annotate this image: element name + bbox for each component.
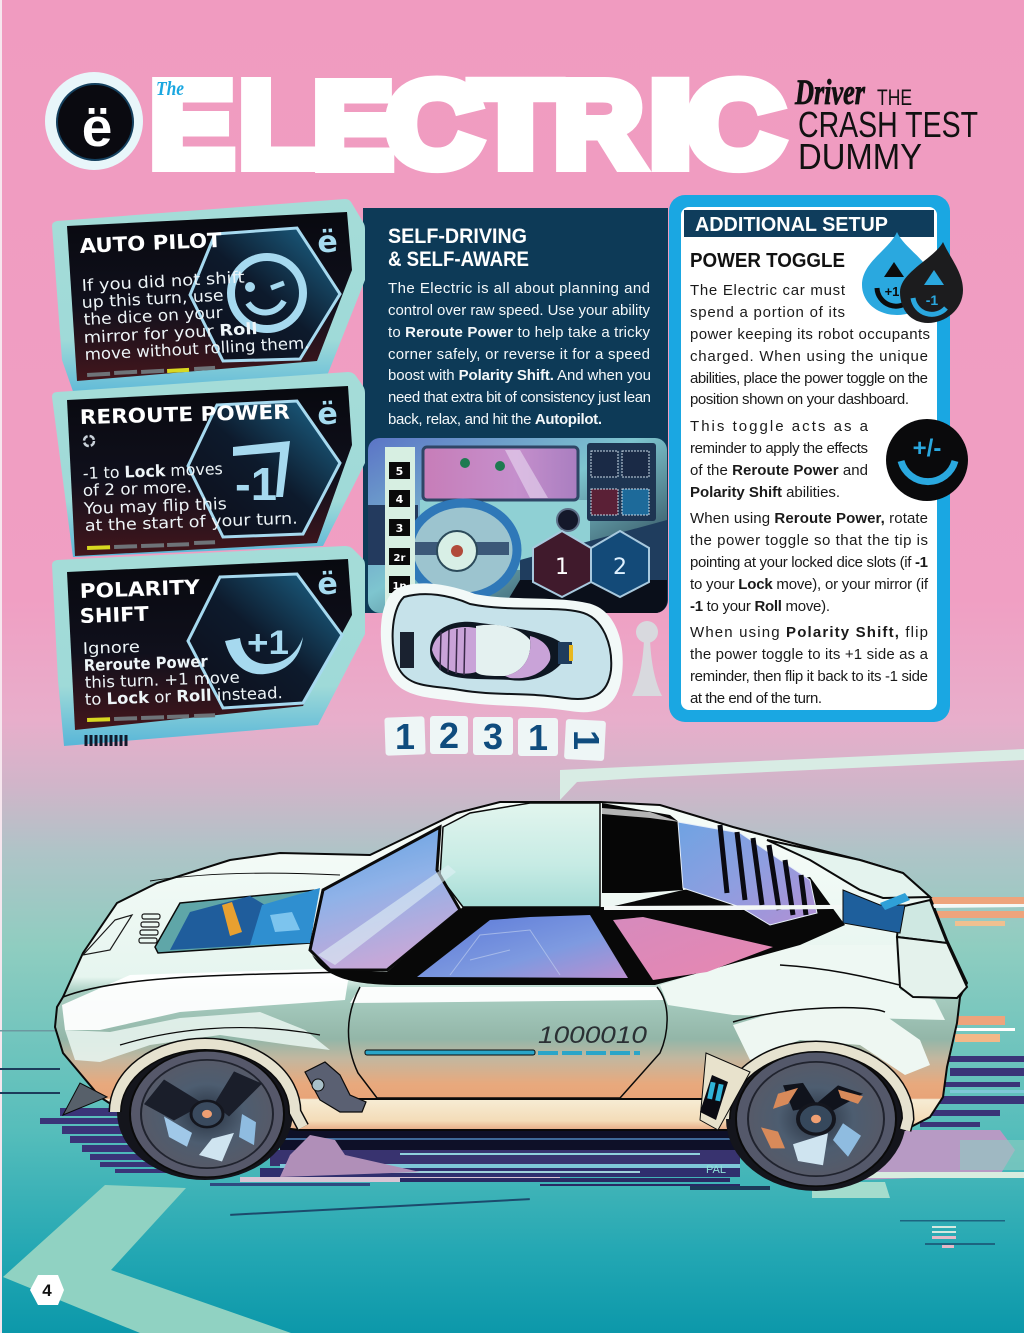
dashboard illustration — [368, 438, 667, 613]
body text: using reroute power: -1 to your Roll move). — [690, 598, 830, 615]
card: auto pilot: up this turn, use — [81, 286, 224, 312]
body text: self-driving description: to Reroute Power to help take a tricky — [388, 324, 650, 341]
title: The Electric: C — [687, 56, 784, 192]
body text: self-driving description: control over raw speed. Use your ability — [388, 302, 650, 319]
hexagon slots 1 and 2: 1 — [555, 555, 569, 580]
body text: power toggle intro: position shown on your dashboard. — [690, 391, 909, 408]
dice tiles: 1 2 3 1 1: 3 — [483, 716, 503, 757]
icon: wink smiley — [231, 257, 303, 329]
title: The Electric: E — [150, 56, 234, 192]
body text: using polarity shift: the power toggle to its +1 side as a — [690, 646, 929, 663]
dice tiles: 1 2 3 1 1: 1 — [528, 717, 548, 758]
title: The Electric: L — [239, 56, 314, 192]
logo badge — [45, 72, 143, 170]
page number badge — [30, 1275, 64, 1305]
card: auto pilot: AUTO PILOT — [79, 228, 222, 258]
orange streaks — [925, 897, 1024, 1042]
title: The Electric: R — [554, 56, 643, 192]
card: polarity shift: Ignore — [82, 637, 140, 658]
sill line — [340, 1098, 710, 1100]
card: polarity shift: to Lock or Roll instead. — [84, 683, 283, 709]
card: polarity shift: SHIFT — [79, 602, 150, 628]
body text: using polarity shift: reminder, then flip it back to its -1 side — [690, 668, 928, 685]
rear-view mirror — [423, 447, 578, 500]
hood vents — [83, 914, 160, 955]
spoiler — [767, 840, 967, 998]
power gauge — [557, 509, 579, 531]
icon: power toggle black drop: -1 — [926, 292, 938, 308]
dice tiles: 1 2 3 1 1: 2 — [439, 715, 459, 756]
title: The Electric — [150, 56, 784, 193]
logo mark: ë — [316, 567, 339, 603]
icon: reroute bracket — [233, 441, 290, 497]
dice tiles: 1 2 3 1 1 — [384, 715, 607, 761]
front wheel — [130, 1051, 284, 1177]
icon: flip arrows — [84, 436, 94, 446]
logo badge: ë — [82, 96, 112, 158]
body text: using reroute power: pointing at your locked dice slots (if -1 — [690, 554, 928, 571]
gear track — [385, 447, 415, 613]
front fin — [63, 1083, 107, 1115]
icon: plus one smile: +1 — [247, 624, 289, 662]
additional setup header — [684, 210, 934, 237]
windshield — [310, 827, 460, 970]
subtitle: driver the crash test dummy: CRASH TEST — [798, 104, 978, 145]
dice tiles: 1 2 3 1 1: 1 — [395, 716, 415, 757]
icon: plus minus toggle — [886, 419, 968, 501]
body text: self-driving description: The Electric is all about planning and — [388, 280, 650, 297]
robot arm behind spoiler — [843, 890, 905, 933]
body text: using polarity shift: When using Polarity Shift, flip — [690, 624, 928, 641]
heading: self-driving — [388, 225, 529, 271]
status dashes — [87, 540, 215, 550]
body text: toggle reminder: Polarity Shift abilities. — [690, 484, 840, 501]
front side window — [417, 915, 628, 978]
title: The Electric: E — [313, 57, 393, 193]
artist signature: PAL — [706, 1164, 726, 1176]
icon: plus one smile — [225, 624, 303, 674]
gear track: 3 — [396, 522, 403, 535]
door outline — [348, 987, 667, 1098]
rear black pillar — [602, 803, 683, 893]
pawn token — [632, 621, 662, 696]
rear wheel — [736, 1052, 896, 1186]
subtitle: driver the crash test dummy: DUMMY — [798, 136, 922, 177]
body text: power toggle intro: charged. When using the unique — [690, 348, 928, 365]
page number badge: 4 — [42, 1281, 52, 1300]
body text: using reroute power — [690, 510, 929, 615]
body text: self-driving description: need that extra bit of consistency just lean — [388, 389, 651, 406]
body text: toggle reminder: This toggle acts as a — [690, 418, 869, 435]
card: auto pilot: If you did not shift — [81, 267, 245, 295]
body text: using reroute power: the power toggle so that the tip is — [690, 532, 928, 549]
card: auto pilot: mirror for your Roll — [83, 319, 258, 347]
barcode — [86, 735, 126, 746]
rear side window — [613, 917, 773, 980]
right streaks — [860, 1130, 1015, 1180]
car illustration — [55, 802, 1024, 1191]
blue door stripe — [365, 1050, 640, 1055]
icon: power toggle blue drop — [862, 232, 933, 315]
body text: power toggle intro: The Electric car must — [690, 282, 846, 299]
card: reroute power: REROUTE POWER — [80, 400, 290, 429]
subtitle: driver the crash test dummy — [794, 72, 978, 177]
icon: power toggle black drop — [900, 242, 963, 323]
panel: additional setup — [669, 195, 950, 722]
body text: self-driving description: corner safely, or reverse it for a speed — [388, 346, 650, 363]
card: auto pilot: the dice on your — [83, 303, 223, 329]
body text: self-driving description: boost with Polarity Shift. And when you — [388, 367, 651, 384]
rear vent — [700, 1053, 750, 1130]
card: reroute power — [52, 372, 365, 557]
dice tiles: 1 2 3 1 1: 1 — [566, 730, 607, 750]
subtitle: driver the crash test dummy: THE — [877, 85, 912, 110]
subtitle: driver the crash test dummy: Driver — [794, 72, 866, 112]
logo mark: ë — [316, 397, 339, 433]
status dashes — [87, 366, 215, 377]
logo mark: ë — [316, 225, 339, 261]
icon: plus minus toggle: +/- — [913, 435, 941, 462]
white light streak — [604, 904, 1024, 910]
card: polarity shift: this turn. +1 move — [84, 668, 240, 692]
gear track: 5 — [396, 465, 403, 478]
card: auto pilot — [52, 199, 365, 400]
body text: toggle reminder: of the Reroute Power and — [690, 462, 868, 479]
front wheel arch — [115, 1044, 303, 1180]
card: reroute power: at the start of your turn. — [84, 509, 298, 535]
body text: self-driving description: back, relax, and hit the Autopilot. — [388, 411, 602, 428]
body text: toggle reminder: reminder to apply the effects — [690, 440, 868, 457]
panel: self-driving description — [363, 208, 668, 613]
heading: self-driving: & SELF-AWARE — [388, 248, 529, 271]
hexagon slots 1 and 2: 2 — [613, 555, 627, 580]
locked dice slots — [587, 443, 656, 521]
card: reroute power: You may flip this — [82, 494, 227, 518]
gear track: 2r — [394, 553, 406, 564]
body text: power toggle intro — [690, 282, 930, 408]
hood opening with robot — [155, 888, 320, 953]
body text: power toggle intro: spend a portion of its — [690, 304, 845, 321]
body text: using reroute power: When using Reroute Power, rotate — [690, 510, 928, 527]
icon: power toggle blue drop: +1 — [885, 284, 899, 299]
status dashes — [87, 713, 215, 722]
body text: toggle reminder — [690, 418, 869, 501]
title: The Electric: The — [156, 78, 184, 100]
ground speed streaks — [0, 897, 1024, 1190]
card: reroute power: -1 — [235, 458, 277, 510]
body text: using polarity shift — [690, 624, 929, 707]
car token — [381, 583, 623, 712]
body text: power toggle intro: power keeping its robot occupants — [690, 326, 930, 343]
title: The Electric: T — [471, 56, 560, 192]
title: The Electric: I — [649, 56, 692, 192]
roof panel — [440, 803, 600, 907]
card: polarity shift — [52, 546, 365, 746]
highlights — [62, 945, 945, 1075]
rear wheel arch — [724, 1047, 908, 1191]
left streaks — [40, 1108, 185, 1173]
card: auto pilot: move without rolling them. — [84, 333, 310, 364]
body text: using polarity shift: at the end of the turn. — [690, 690, 822, 707]
car body — [55, 802, 967, 1130]
black window surround — [312, 877, 845, 985]
heading: self-driving: SELF-DRIVING — [388, 225, 527, 248]
card: polarity shift: POLARITY — [79, 575, 201, 603]
additional setup header: ADDITIONAL SETUP — [695, 213, 888, 236]
rear louvered glass — [678, 822, 817, 925]
card: reroute power: -1 to Lock moves — [82, 459, 223, 483]
heading: power toggle: POWER TOGGLE — [690, 249, 845, 272]
gear track: 4 — [396, 493, 404, 506]
robot under door mirror — [305, 1062, 366, 1112]
body text: self-driving description — [388, 280, 651, 428]
body text: using reroute power: to your Lock move), or your mirror (if — [690, 576, 929, 593]
card: polarity shift: Reroute Power — [83, 652, 208, 675]
body text: power toggle intro: abilities, place the power toggle on the — [690, 370, 928, 387]
car number: 1000010 — [538, 1022, 648, 1049]
hexagon slots 1 and 2 — [533, 531, 649, 597]
card: reroute power: of 2 or more. — [82, 477, 192, 500]
hood line — [63, 972, 350, 997]
title: The Electric: C — [386, 56, 482, 192]
steering wheel — [409, 503, 517, 597]
gear track: 1p — [392, 581, 407, 592]
